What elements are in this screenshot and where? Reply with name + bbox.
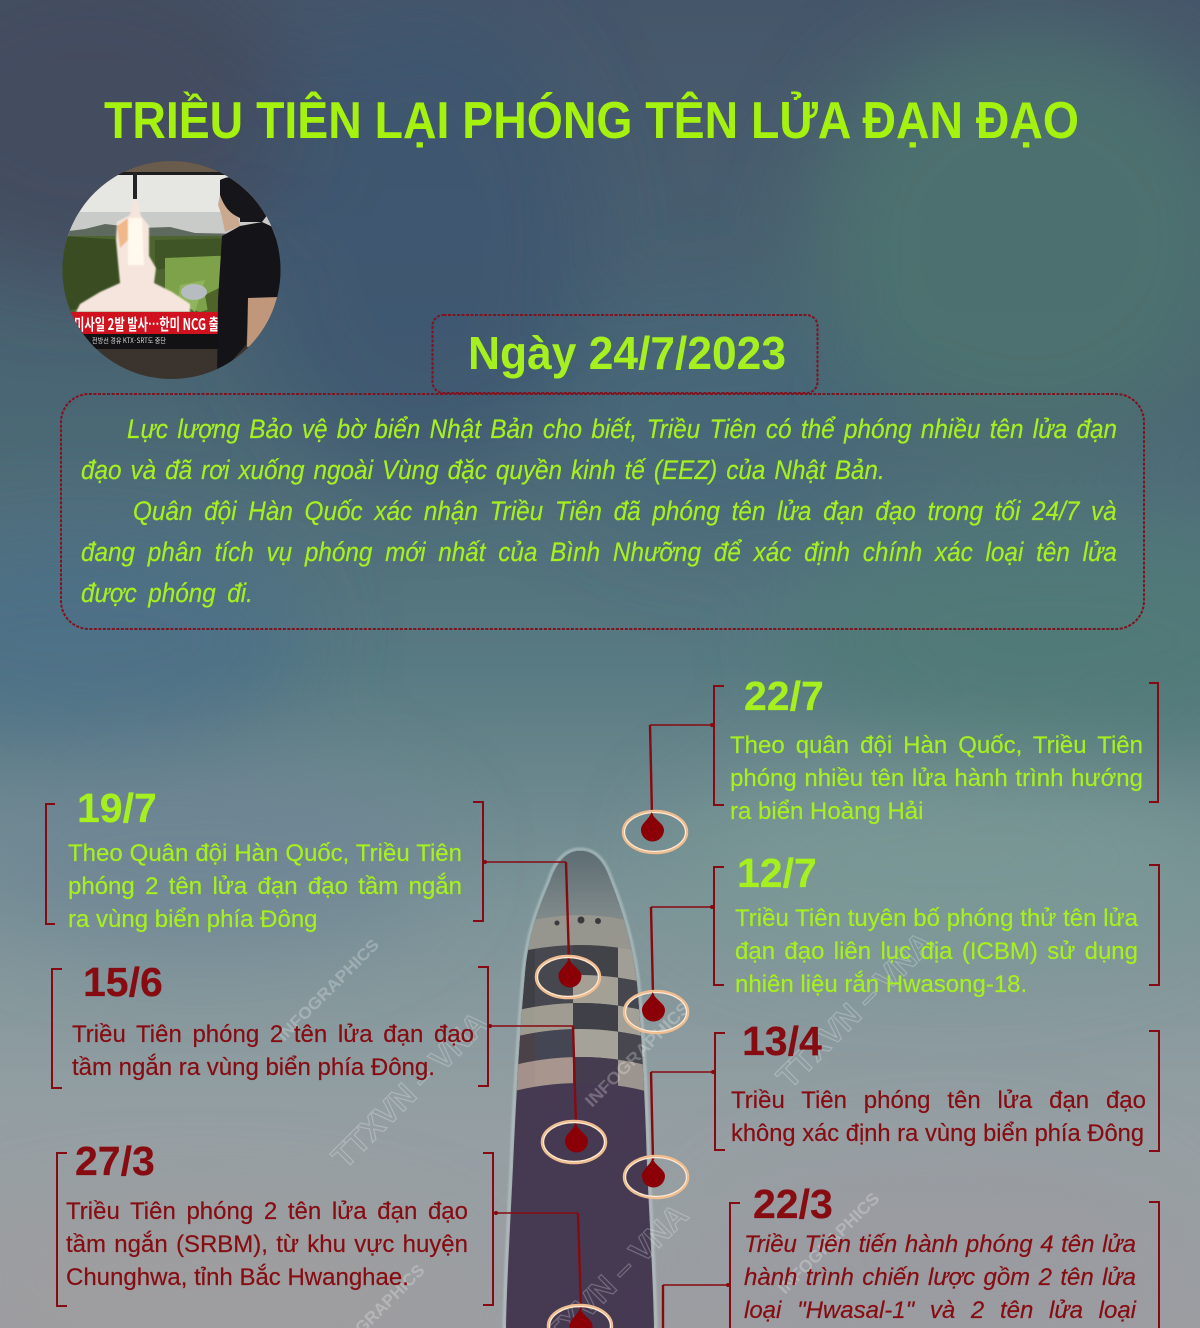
panel: summary paragraph: được phóng đi. — [81, 578, 253, 608]
event: 19/7: phóng 2 tên lửa đạn đạo tầm ngắn — [68, 873, 462, 900]
event: 19/7: Theo Quân đội Hàn Quốc, Triều Tiên — [68, 840, 462, 867]
event: 22/3: loại "Hwasal-1" và 2 tên lửa loại — [744, 1297, 1136, 1324]
photo: man watching missile launch on TV: 전방선 경유 KTX·SRT도 중단 — [92, 336, 166, 346]
event: 22/7: phóng nhiều tên lửa hành trình hướng — [730, 765, 1143, 792]
background artwork and rocket: INFOGRAPHICS — [581, 998, 694, 1111]
event: 22/3: 22/3 — [753, 1181, 833, 1227]
event: 12/7: 12/7 — [737, 850, 817, 896]
background artwork and rocket: INFOGRAPHICS — [273, 935, 383, 1045]
date box — [432, 314, 818, 394]
event: 27/3: tầm ngắn (SRBM), từ khu vực huyện — [66, 1231, 468, 1258]
event: 22/7: 22/7 — [744, 673, 824, 719]
background artwork and rocket: INFOGRAPHICS — [774, 1189, 883, 1298]
event: 12/7: nhiên liệu rắn Hwasong-18. — [735, 971, 1027, 998]
photo: man watching missile launch on TV — [62, 161, 280, 379]
panel: summary paragraph: Quân đội Hàn Quốc xác nhận Triều Tiên đã phóng tên lửa đạn đạo trong tối 24/7 và — [133, 496, 1117, 526]
event: 13/4: Triều Tiên phóng tên lửa đạn đạo — [731, 1087, 1146, 1114]
event: 22/7 — [730, 673, 1143, 825]
event: 12/7: Triều Tiên tuyên bố phóng thử tên lửa — [735, 905, 1138, 932]
event: 15/6: 15/6 — [83, 959, 163, 1005]
event: 19/7: ra vùng biển phía Đông — [68, 906, 318, 933]
event: 19/7: 19/7 — [77, 785, 157, 831]
event: 19/7 — [68, 785, 462, 933]
event: 22/3: hành trình chiến lược gồm 2 tên lửa — [744, 1264, 1136, 1291]
event: 12/7 — [735, 850, 1138, 998]
panel: summary paragraph — [60, 393, 1145, 630]
event: 27/3: Chunghwa, tỉnh Bắc Hwanghae. — [66, 1264, 409, 1291]
date box: Ngày 24/7/2023 — [468, 327, 786, 379]
event: 15/6: Triều Tiên phóng 2 tên lửa đạn đạo — [72, 1021, 474, 1048]
event: 27/3: 27/3 — [75, 1138, 155, 1184]
event: 13/4: 13/4 — [742, 1018, 822, 1064]
event: 15/6: tầm ngắn ra vùng biển phía Đông. — [72, 1054, 435, 1081]
event: 27/3: Triều Tiên phóng 2 tên lửa đạn đạo — [66, 1198, 468, 1225]
background artwork and rocket: TTXVN – VNA — [769, 925, 940, 1095]
background artwork and rocket: TTXVN – VNA — [324, 1005, 495, 1175]
event: 12/7: đạn đạo liên lục địa (ICBM) sử dụng — [735, 938, 1138, 965]
panel: summary paragraph: đạo và đã rơi xuống ngoài Vùng đặc quyền kinh tế (EEZ) của Nhật Bản. — [81, 455, 885, 485]
photo: man watching missile launch on TV: 미사일 2발 발사…한미 NCG 출 — [74, 311, 219, 335]
panel: summary paragraph: đang phân tích vụ phóng mới nhất của Bình Nhưỡng để xác định chính xác loại tên lửa — [81, 537, 1117, 567]
event: 13/4: không xác định ra vùng biển phía Đông — [731, 1121, 1144, 1147]
event: 22/7: ra biển Hoàng Hải — [730, 798, 923, 825]
event: 22/3: Triều Tiên tiến hành phóng 4 tên lửa — [744, 1231, 1136, 1258]
panel: summary paragraph: Lực lượng Bảo vệ bờ biển Nhật Bản cho biết, Triều Tiên có thể phóng nhiều tên lửa đạn — [127, 414, 1117, 444]
event: 22/7: Theo quân đội Hàn Quốc, Triều Tiên — [730, 732, 1143, 759]
